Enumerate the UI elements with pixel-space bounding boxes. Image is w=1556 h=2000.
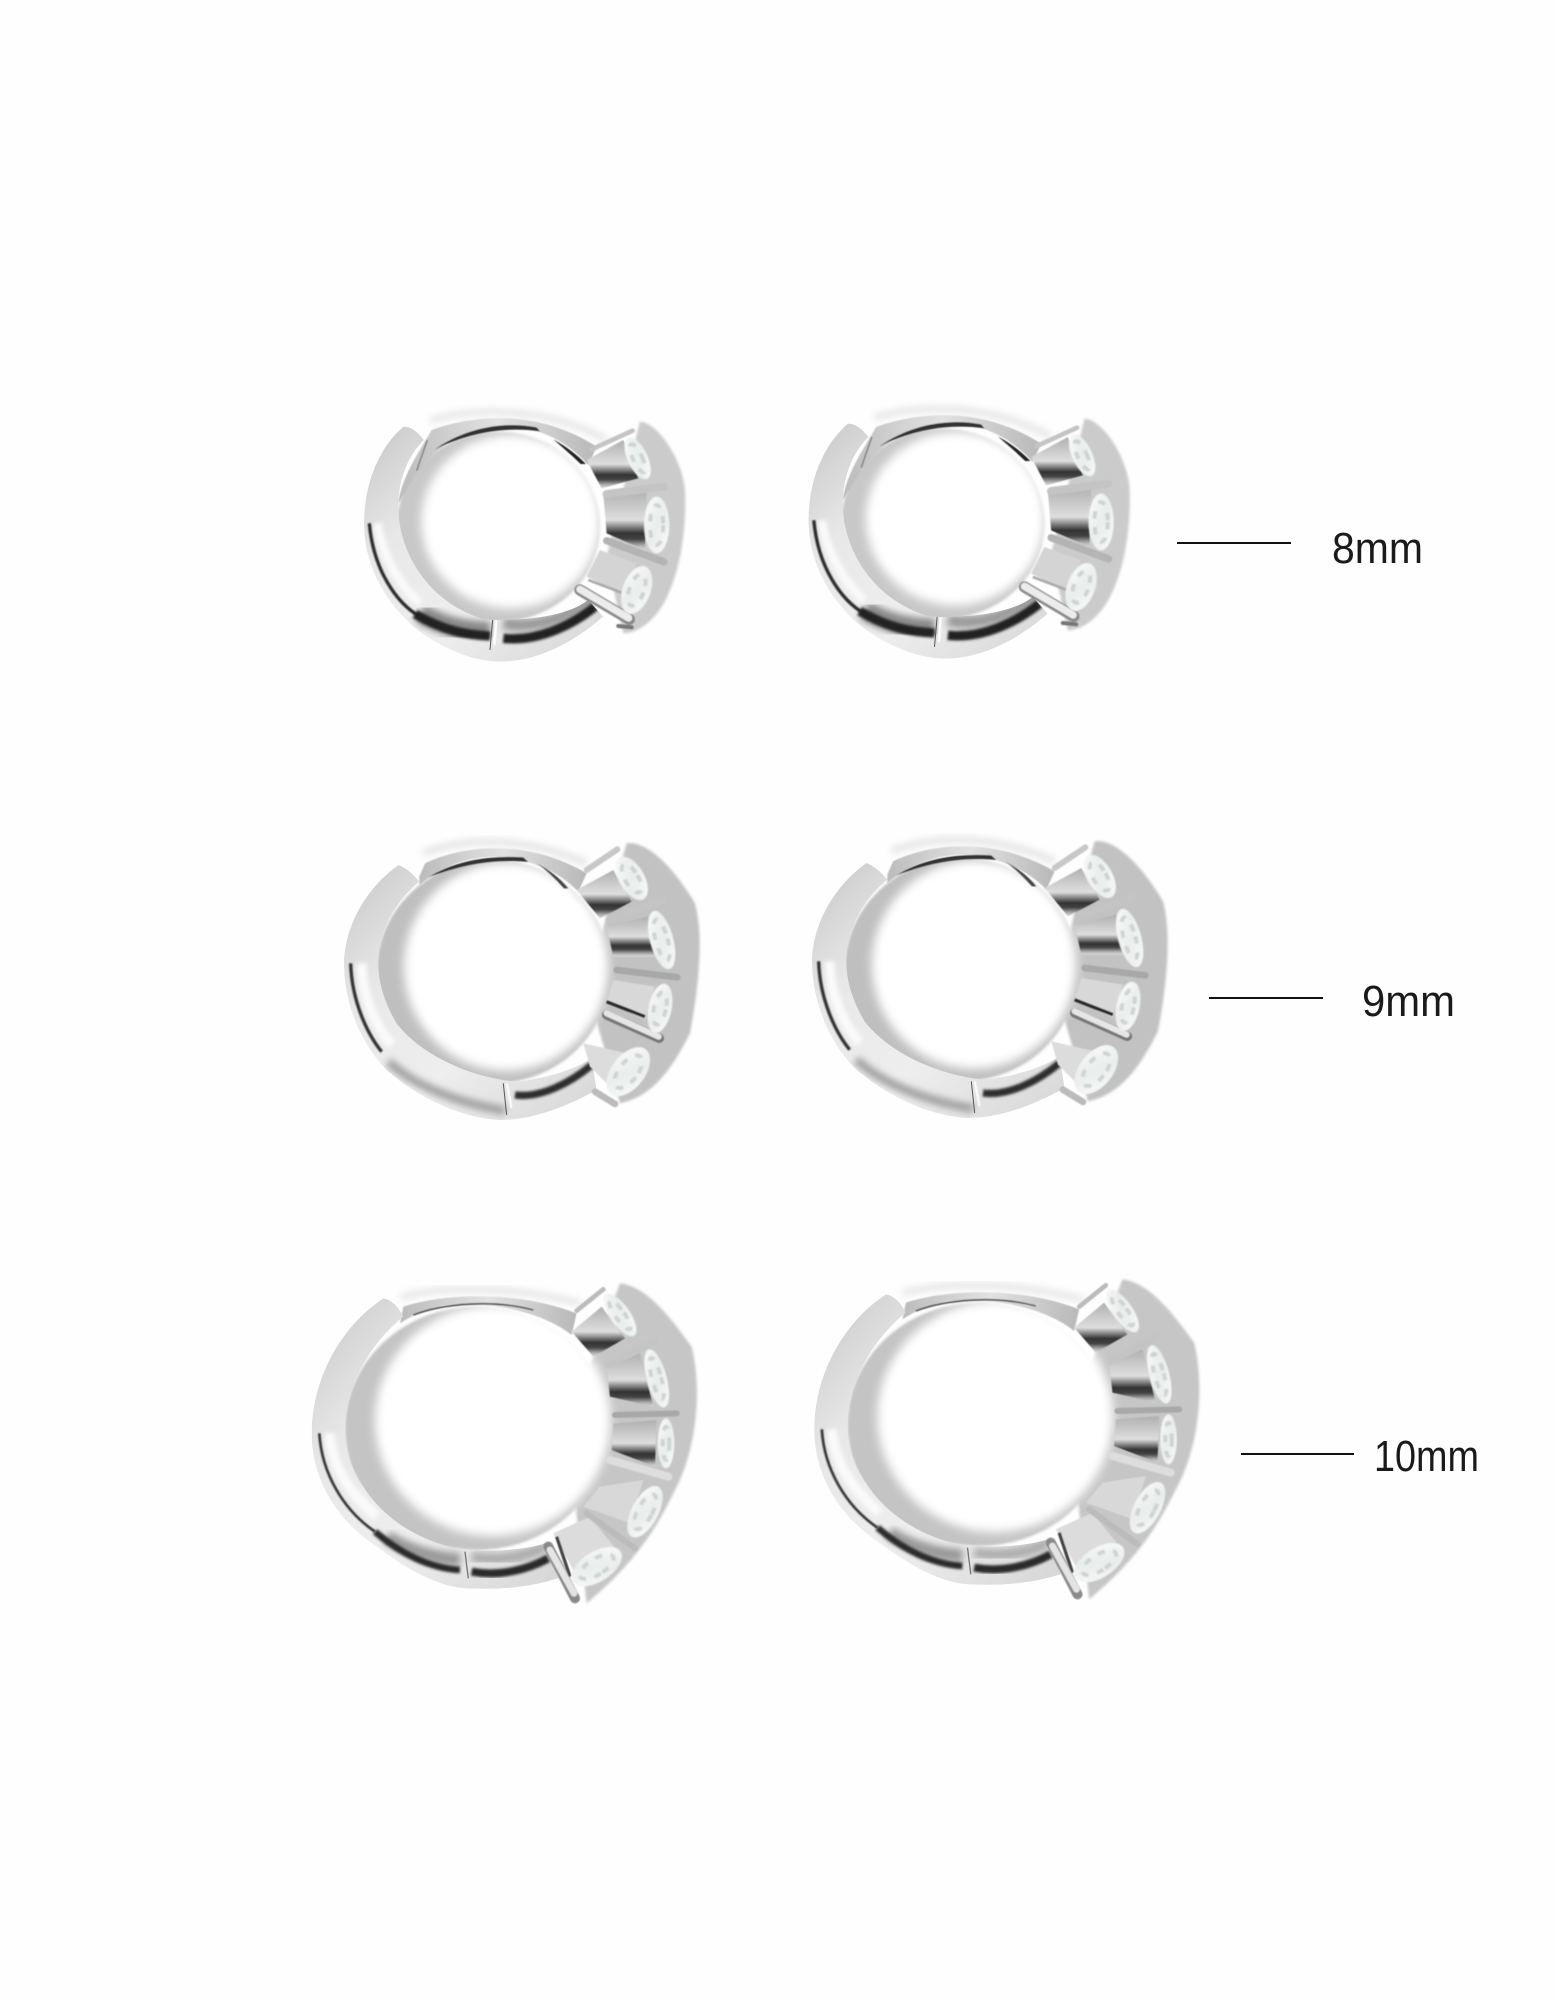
top arm [398, 418, 597, 503]
shadow [345, 1283, 697, 1603]
earring 10mm right [814, 1279, 1199, 1599]
size marker 10mm: 10mm [1374, 1432, 1479, 1481]
diamonds [565, 1289, 674, 1594]
main band [312, 1298, 558, 1589]
stone settings [553, 1307, 657, 1577]
earring 9mm right [812, 840, 1168, 1118]
main band [344, 865, 597, 1120]
prongs [587, 849, 677, 1104]
diamonds [598, 851, 681, 1104]
top arm [400, 1296, 577, 1335]
earring 8mm left [364, 412, 685, 662]
earring 8mm right [808, 409, 1130, 659]
earring 10mm left [312, 1283, 697, 1603]
shadow [377, 842, 700, 1103]
main band [364, 427, 603, 662]
prongs [580, 431, 664, 627]
top arm [419, 848, 587, 892]
stone settings [587, 440, 647, 594]
size marker 9mm: 9mm [1362, 977, 1455, 1026]
shadow [397, 412, 685, 633]
stone settings [577, 870, 655, 1083]
size guide canvas [312, 404, 1476, 1604]
earring 9mm left [344, 842, 700, 1120]
size marker 8mm: 8mm [1332, 524, 1423, 573]
diamonds [615, 434, 669, 618]
prongs [548, 1289, 677, 1598]
